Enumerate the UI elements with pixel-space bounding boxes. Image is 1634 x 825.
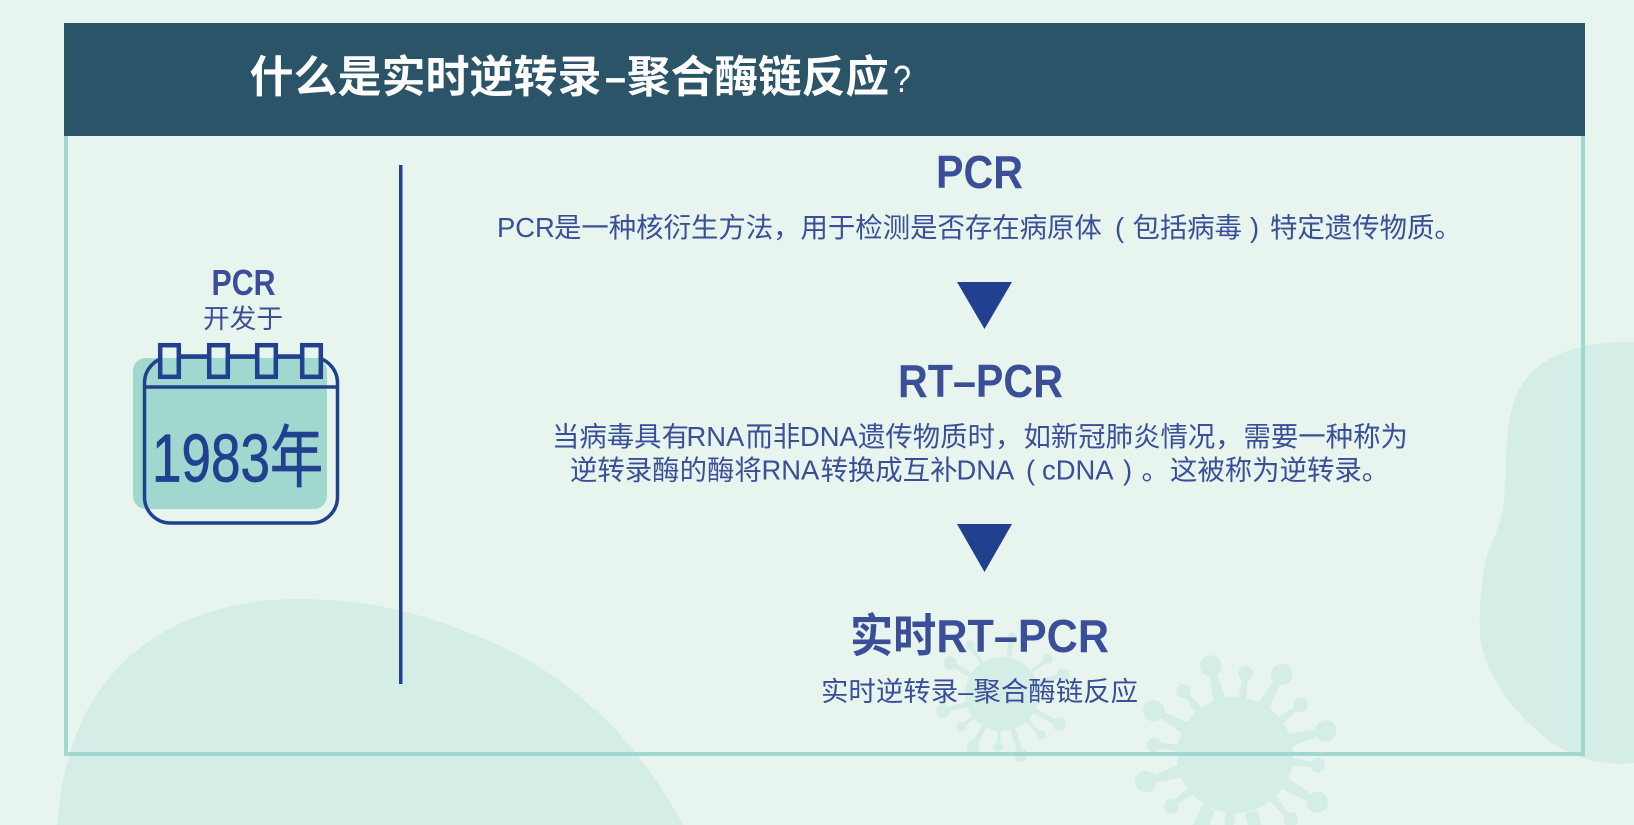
arrow: RT-PCR to real-time RT-PCR — [957, 524, 1012, 572]
vertical divider — [399, 165, 402, 684]
title: 什么是实时逆转录 — [250, 53, 602, 102]
title: – — [605, 53, 626, 102]
label: developed in: 开发于 — [203, 304, 283, 334]
heading: real-time RT-PCR: 实时RT–PCR — [850, 610, 1109, 662]
text: RT-PCR description: DNA — [956, 454, 1015, 486]
step: real-time RT-PCR — [821, 610, 1138, 707]
title: 聚合酶链反应 — [627, 53, 889, 102]
text: real-time RT-PCR description: 实时逆转录–聚合酶链反应 — [821, 677, 1138, 707]
text: RT-PCR description: 转换成互补 — [820, 454, 957, 486]
text: RT-PCR description: 。 — [1142, 454, 1169, 486]
icon: calendar: 1983年 — [152, 420, 323, 496]
header bar — [64, 23, 1585, 136]
text: RT-PCR description: 如新冠肺炎情况， — [1024, 421, 1243, 452]
title — [250, 53, 911, 102]
icon: calendar — [133, 345, 338, 523]
left column: PCR developed in 1983 — [133, 262, 338, 523]
text: PCR description: ( — [1115, 212, 1124, 243]
label: PCR: PCR — [212, 262, 276, 303]
text: PCR description: 包括病毒 — [1132, 212, 1242, 243]
text: RT-PCR description: 而非 — [746, 421, 800, 452]
text: RT-PCR description: RNA — [686, 421, 745, 452]
text: RT-PCR description: ) — [1123, 454, 1132, 486]
text: RT-PCR description: 需要一种称为 — [1244, 421, 1408, 452]
icon: large virus — [1135, 655, 1336, 825]
step: RT-PCR — [552, 355, 1408, 486]
text: RT-PCR description: 遗传物质时， — [858, 421, 1022, 452]
heading: RT-PCR: RT–PCR — [898, 355, 1063, 407]
text: PCR description: 是一种核衍生方法，用于检测是否存在病原体 — [554, 212, 1102, 243]
panel frame — [66, 130, 1583, 754]
text: RT-PCR description: 这被称为逆转录。 — [1170, 454, 1389, 486]
step: PCR — [497, 146, 1462, 243]
text: PCR description: 特定遗传物质。 — [1270, 212, 1462, 243]
text: RT-PCR description: ( — [1026, 454, 1035, 486]
background blob: bottom left — [57, 599, 683, 825]
background blob: right — [1480, 342, 1634, 764]
title: ? — [893, 59, 911, 101]
text: PCR description: PCR — [497, 212, 555, 243]
icon: small virus — [936, 632, 1070, 762]
text: RT-PCR description: DNA — [800, 421, 859, 452]
text: RT-PCR description: 逆转录酶的酶将 — [570, 454, 762, 486]
heading: PCR: PCR — [936, 146, 1023, 198]
text: RT-PCR description — [552, 421, 1408, 486]
text: RT-PCR description: 当病毒具有 — [552, 421, 689, 452]
arrow: PCR to RT-PCR — [957, 282, 1012, 329]
text: RT-PCR description: RNA — [762, 454, 820, 486]
text: PCR description: ) — [1250, 212, 1259, 243]
text: RT-PCR description: cDNA — [1042, 454, 1114, 486]
